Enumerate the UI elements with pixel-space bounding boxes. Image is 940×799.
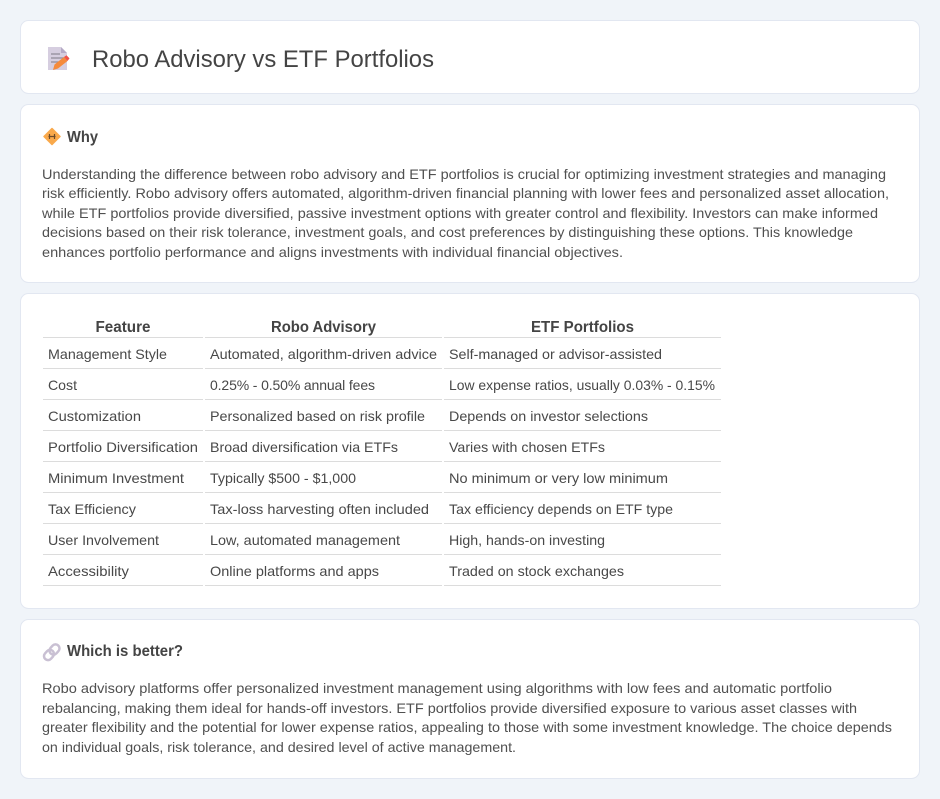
why paragraph <box>41 166 889 260</box>
row: user involvement <box>48 532 605 548</box>
row: minimum investment: Minimum Investment <box>48 470 184 486</box>
row: user involvement: Low, automated management <box>210 532 400 548</box>
row: user involvement: User Involvement <box>48 532 159 548</box>
row: user involvement: High, hands-on investing <box>449 532 605 548</box>
row: tax efficiency: Tax-loss harvesting often included <box>210 501 429 517</box>
row: cost <box>48 377 715 393</box>
panel: why <box>20 104 920 282</box>
row: management style: Self-managed or advisor-assisted <box>449 346 662 362</box>
row: management style: Automated, algorithm-driven advice <box>210 346 437 362</box>
icon: document with pencil <box>48 47 70 70</box>
row: portfolio diversification <box>48 439 605 455</box>
table header row: Feature <box>96 319 151 336</box>
row: cost: Low expense ratios, usually 0.03% - 0.15% <box>449 377 715 393</box>
row: management style <box>48 346 662 362</box>
row: accessibility: Traded on stock exchanges <box>449 563 624 579</box>
table header row <box>96 319 634 336</box>
row: accessibility: Online platforms and apps <box>210 563 379 579</box>
row: customization: Personalized based on risk profile <box>210 408 425 424</box>
why paragraph: decisions based on their risk tolerance, investment goals, and cost preferences by distinguishing these options. This knowledge <box>42 224 853 240</box>
row: tax efficiency: Tax Efficiency <box>48 501 136 517</box>
table header row: Robo Advisory <box>271 319 376 336</box>
row: management style: Management Style <box>48 346 167 362</box>
row: tax efficiency <box>48 501 673 517</box>
which is better paragraph: rebalancing, making them ideal for hands-off investors. ETF portfolios provide diversified exposure to various asset classes with <box>42 700 857 716</box>
icon: chain link <box>42 643 61 662</box>
row: cost: Cost <box>48 377 77 393</box>
panel: comparison table <box>20 294 920 608</box>
row: minimum investment <box>48 470 668 486</box>
which is better paragraph <box>42 680 892 755</box>
row: minimum investment: Typically $500 - $1,000 <box>210 470 356 486</box>
row: portfolio diversification: Broad diversification via ETFs <box>210 439 398 455</box>
row: accessibility <box>48 563 624 579</box>
which is better paragraph: on individual goals, risk tolerance, and desired level of active management. <box>42 739 516 755</box>
row: accessibility: Accessibility <box>48 563 129 579</box>
row: minimum investment: No minimum or very low minimum <box>449 470 668 486</box>
icon: diamond sign <box>44 128 60 144</box>
row: cost: 0.25% - 0.50% annual fees <box>210 377 375 393</box>
heading: why: Why <box>67 129 98 146</box>
title: Robo Advisory vs ETF Portfolios <box>92 46 434 73</box>
why paragraph: enhances portfolio performance and aligns investments with individual financial objectives. <box>42 244 623 260</box>
row: customization: Customization <box>48 408 141 424</box>
why paragraph: while ETF portfolios provide diversified, passive investment options with greater control and flexibility. Investors can make informed <box>41 205 878 221</box>
row: portfolio diversification: Varies with chosen ETFs <box>449 439 605 455</box>
panel: which is better <box>20 620 920 778</box>
heading: which is better: Which is better? <box>67 643 183 660</box>
row: tax efficiency: Tax efficiency depends on ETF type <box>449 501 673 517</box>
table header row: ETF Portfolios <box>531 319 634 336</box>
why paragraph: Understanding the difference between robo advisory and ETF portfolios is crucial for optimizing investment strategies and managing <box>42 166 886 182</box>
why paragraph: risk efficiently. Robo advisory offers automated, algorithm-driven financial planning with lower fees and personalized asset allocation, <box>42 185 889 201</box>
row: portfolio diversification: Portfolio Diversification <box>48 439 198 455</box>
row: customization: Depends on investor selections <box>449 408 648 424</box>
row: customization <box>48 408 648 424</box>
which is better paragraph: greater flexibility and the potential for lower expense ratios, appealing to those with some investment knowledge. The choice depends <box>42 719 892 735</box>
header panel <box>20 20 920 94</box>
which is better paragraph: Robo advisory platforms offer personalized investment management using algorithms with low fees and automatic portfolio <box>42 680 832 696</box>
